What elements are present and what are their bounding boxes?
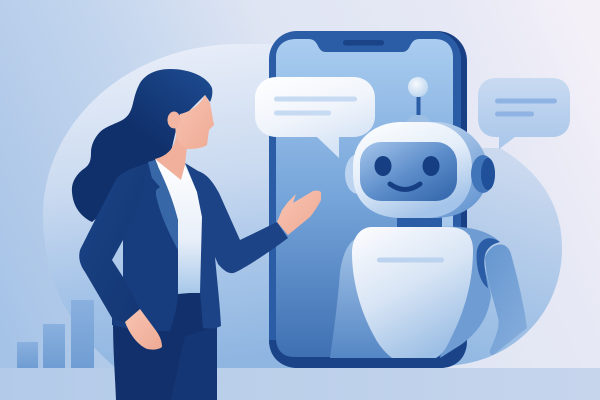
- robot right arm: [485, 244, 527, 355]
- pants: [113, 293, 217, 400]
- jacket right side and arm: [185, 163, 288, 329]
- speech bubble blue: [478, 78, 570, 149]
- phone side: [275, 31, 467, 368]
- robot shoulder band: [477, 238, 500, 288]
- smartphone: [269, 31, 467, 368]
- robot right ear: [471, 155, 495, 193]
- left hand: [125, 309, 162, 350]
- robot left arm: [330, 238, 395, 358]
- phone lower corner over robot: [320, 343, 467, 368]
- robot: [330, 77, 527, 358]
- robot chest line: [377, 258, 444, 262]
- robot head: [353, 122, 472, 218]
- robot head back: [410, 122, 488, 218]
- robot antenna: [406, 77, 431, 122]
- floor: [0, 368, 600, 400]
- speech bubble white: [255, 77, 375, 158]
- neck and face: [155, 95, 214, 181]
- robot face screen: [360, 142, 457, 201]
- background blob right: [400, 148, 562, 366]
- robot shoulder: [440, 227, 500, 358]
- robot neck: [397, 214, 453, 229]
- background blob left: [43, 44, 330, 368]
- phone bottom edge: [269, 320, 467, 368]
- robot torso: [352, 227, 473, 358]
- ear: [168, 112, 180, 128]
- face: [175, 95, 214, 149]
- robot neck highlight: [442, 214, 453, 229]
- phone screen: [276, 39, 453, 357]
- shirt: [155, 159, 202, 294]
- jacket lapel: [148, 160, 178, 250]
- robot smile: [390, 184, 420, 190]
- robot eyes: [374, 156, 440, 176]
- phone frame: [269, 31, 461, 368]
- jacket left sleeve: [79, 163, 148, 323]
- jacket body: [112, 163, 178, 331]
- woman: [72, 69, 321, 400]
- robot left ear: [345, 154, 371, 194]
- bar chart: [17, 300, 94, 368]
- hair: [72, 69, 212, 222]
- pants shadow: [171, 327, 217, 400]
- phone speaker: [343, 40, 384, 46]
- neck: [155, 136, 187, 181]
- right hand: [277, 191, 321, 235]
